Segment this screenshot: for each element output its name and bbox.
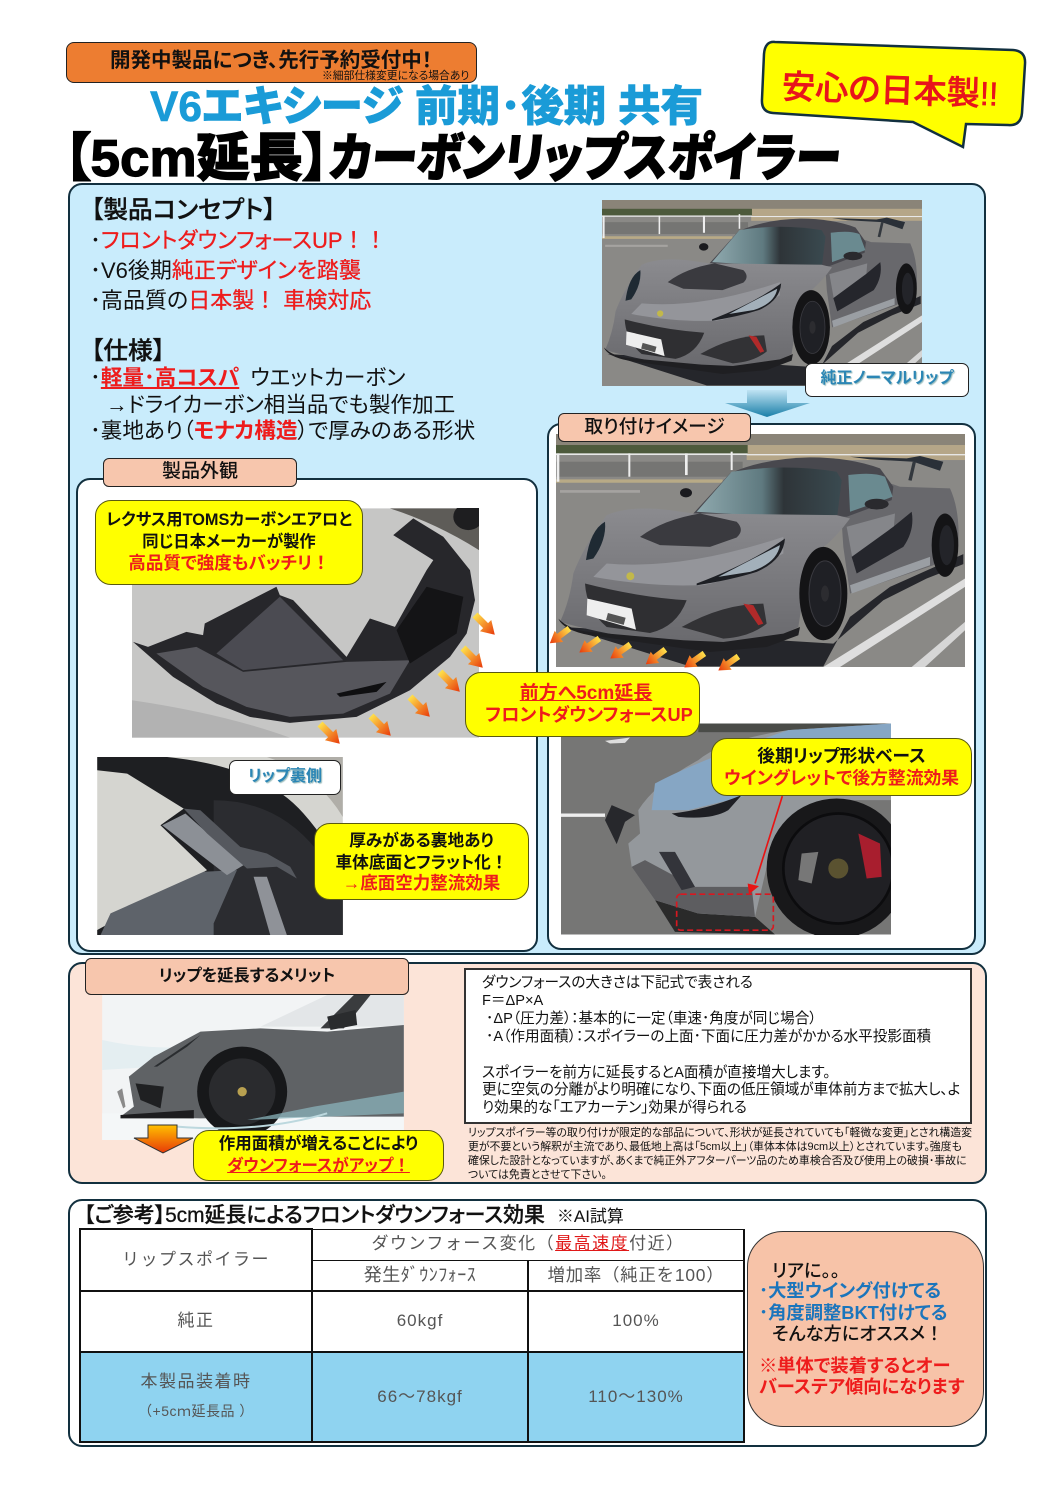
callout: underside flat: 車体底面とフラット化！ (335, 852, 508, 872)
callout: downforce up: ダウンフォースがアップ！ (227, 1157, 410, 1175)
photo: carbon lip top (132, 508, 479, 738)
tab: installed image (558, 413, 751, 442)
tab: merit (85, 958, 409, 995)
table: downforce: 100% (612, 1311, 660, 1330)
top notice bar (66, 42, 477, 83)
table: downforce (79, 1228, 745, 1443)
callout: 5cm forward: 前方へ5cm延長 (520, 683, 652, 704)
table: downforce: 60kgf (397, 1311, 443, 1330)
table: downforce: 発生ﾀﾞｳﾝﾌｫｰｽ (364, 1265, 476, 1285)
callout: winglet: 後期リップ形状ベース (757, 746, 926, 766)
spec list: →ドライカーボン相当品でも製作加工 (106, 392, 455, 417)
title product part: カーボンリップスポイラー (327, 130, 844, 188)
callout: underside flat (314, 823, 529, 900)
callout: underside flat: 厚みがある裏地あり (349, 831, 494, 850)
photo: lip side close-up (561, 724, 891, 935)
callout: winglet (711, 738, 972, 796)
spec list: ･裏地あり（モナカ構造）で厚みのある形状 (90, 418, 475, 443)
note box: recommendation (747, 1231, 984, 1427)
callout: 5cm forward: フロントダウンフォースUP (485, 704, 693, 724)
table: downforce: 増加率（純正を100） (548, 1265, 724, 1285)
concept list (90, 228, 387, 313)
photo: lip underside (97, 757, 343, 935)
concept list: ･フロントダウンフォースUP！！ (90, 228, 387, 253)
callout: TOMS maker: 高品質で強度もバッチリ！ (128, 553, 330, 573)
tab: product appearance (103, 458, 297, 487)
label: lip underside: リップ裏側 (248, 768, 322, 785)
callout: winglet: ウイングレットで後方整流効果 (724, 768, 959, 788)
note box: recommendation: ･大型ウイング付けてる (759, 1280, 941, 1301)
note box: recommendation: ※単体で装着するとオー (759, 1355, 951, 1376)
concept list: ･高品質の日本製！ 車検対応 (90, 288, 371, 313)
concept list: ･V6後期純正デザインを踏襲 (90, 258, 361, 283)
formula box: ダウンフォースの大きさは下記式で表される F＝ΔP×A ･ΔP（圧力差）：基本的に一定（車速･角度が同じ場合） ･A（作用面積）：スポイラーの上面･下面に圧力差がかかる水平投影面積 スポイラーを前方に延長するとA面積が直接増大します。 更に空気の分離がより明確になり、下面の低圧領域が車体前方まで拡大し、よ り効果的な「エアカーテン」効果が得られる (482, 975, 960, 1116)
callout: underside flat: →底面空力整流効果 (343, 873, 500, 893)
tab: product appearance: 製品外観 (162, 461, 238, 482)
label: lip underside (229, 760, 341, 795)
arrow: stock to installed (725, 390, 810, 417)
label: stock lip (805, 363, 969, 397)
table: downforce: （+5cｍ延長品 ） (138, 1403, 254, 1419)
table: downforce: 純正 (178, 1311, 214, 1330)
panel: product appearance (76, 478, 538, 952)
table: downforce: 本製品装着時 (140, 1372, 252, 1391)
heading: concept: 【製品コンセプト】 (91, 197, 276, 224)
callout: TOMS maker: レクサス用TOMSカーボンエアロと (106, 511, 352, 529)
label: stock lip: 純正ノーマルリップ (821, 370, 953, 387)
photo: installed car (556, 434, 965, 667)
spec list (90, 365, 475, 443)
panel: product concept (68, 183, 986, 955)
panel: downforce reference (68, 1199, 987, 1447)
bubble text: 安心の日本製!! (781, 69, 999, 114)
notice footnote: ※細部仕様変更になる場合あり (322, 70, 469, 82)
note box: recommendation: ･角度調整BKT付けてる (759, 1302, 948, 1323)
title bracket part: 【5cm延長】 (64, 130, 329, 188)
speech bubble: made in Japan (760, 40, 1026, 149)
note box: recommendation: リアに。。 (772, 1260, 840, 1281)
main title (64, 130, 844, 188)
photo: merit car airflow (102, 995, 404, 1140)
callout: downforce up: 作用面積が増えることにより (219, 1135, 418, 1153)
disclaimer text: リップスポイラー等の取り付けが限定的な部品について、形状が延長されていても「軽微な変更」とされ構造変 更が不要という解釈が主流であり、最低地上高は「5cm以上」（車体本体は9cm以上）とされています。強度も 確保した設計となっていますが、あくまで純正外アフターパーツ品のため車検合否及び使用上の破損･事故に ついては免責とさせて下さい。 (468, 1127, 972, 1181)
panel: installed image (547, 423, 976, 950)
tab: installed image: 取り付けイメージ (584, 416, 725, 437)
heading: spec: 【仕様】 (91, 338, 165, 365)
callout: TOMS maker (95, 500, 363, 585)
table: downforce: ダウンフォース変化（最高速度付近） (371, 1234, 685, 1253)
subtitle: V6エキシージ 前期･後期 共有 (150, 84, 703, 131)
photo: stock lip car (602, 200, 922, 386)
table: downforce: リップスポイラー (122, 1250, 270, 1268)
spec list: ･軽量･高コスパ ウエットカーボン (90, 365, 405, 390)
arrows: lip extension direction (318, 612, 740, 744)
callout: downforce up (193, 1130, 444, 1181)
table: downforce: 110～130% (588, 1386, 684, 1406)
callout: TOMS maker: 同じ日本メーカーが製作 (142, 532, 316, 550)
table: downforce: 66～78kgf (377, 1386, 463, 1406)
callout: 5cm forward (465, 672, 700, 737)
tab: merit: リップを延長するメリット (159, 967, 335, 985)
note box: recommendation: バーステア傾向になります (759, 1376, 964, 1397)
heading: reference: 【ご参考】5cm延長によるフロントダウンフォース効果 ※AI試算 (84, 1204, 624, 1227)
panel: merit (68, 962, 987, 1184)
notice text: 開発中製品につき、先行予約受付中！ (110, 49, 432, 72)
arrow: merit down (134, 1124, 194, 1154)
note box: recommendation: そんな方にオススメ！ (772, 1323, 943, 1344)
